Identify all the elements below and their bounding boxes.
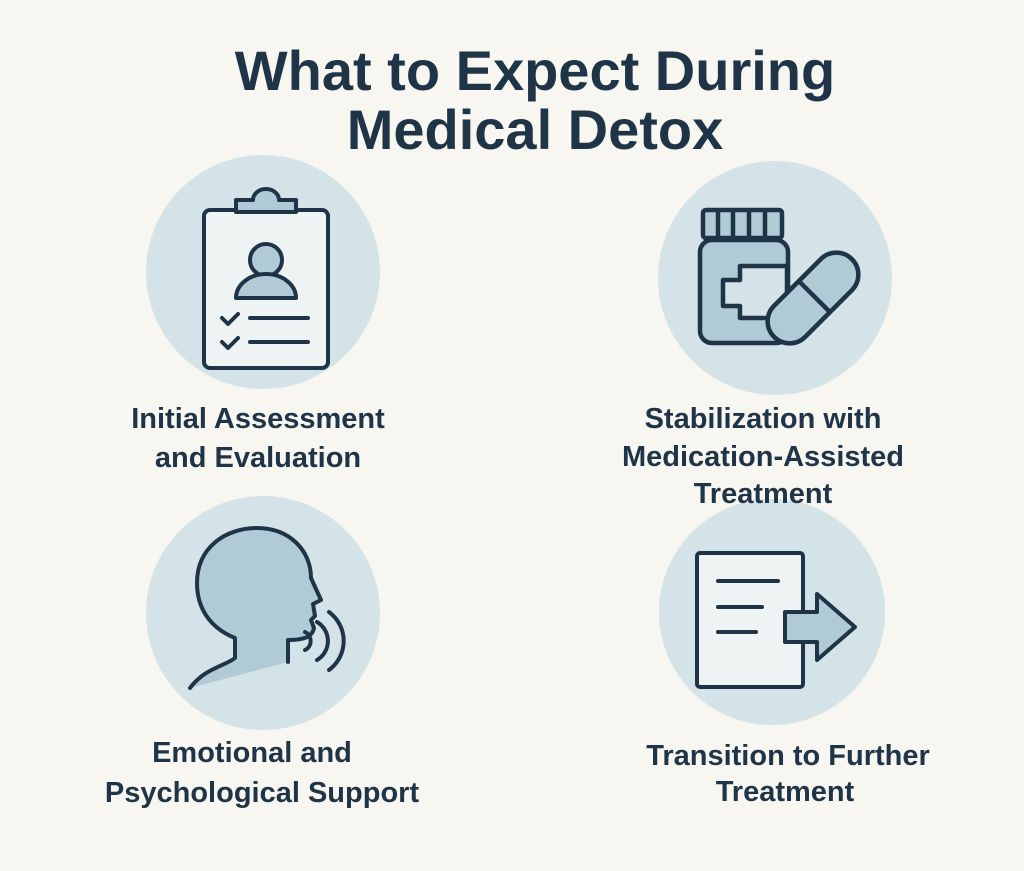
label: Treatment [694, 478, 833, 510]
label: Emotional and [152, 737, 352, 769]
label: Psychological Support [105, 777, 419, 809]
label [646, 740, 930, 808]
panel: transition [646, 499, 930, 808]
icon: clipboard [146, 155, 380, 389]
label: Stabilization with [645, 403, 881, 435]
icon: pill bottle [658, 161, 892, 395]
icon: head with sound [146, 496, 380, 730]
label: Initial Assessment [131, 403, 385, 435]
panel: emotional support [105, 496, 419, 809]
label: Treatment [716, 776, 855, 808]
label [105, 737, 419, 809]
panel: initial assessment [131, 155, 385, 474]
title: What to Expect During [235, 39, 835, 102]
icon: document with arrow [659, 499, 885, 725]
label [131, 403, 385, 474]
label [622, 403, 904, 510]
title: Medical Detox [347, 98, 723, 161]
label: and Evaluation [155, 442, 361, 474]
label: Medication-Assisted [622, 441, 904, 473]
panel: stabilization [622, 161, 904, 510]
label: Transition to Further [646, 740, 930, 772]
title [235, 39, 835, 161]
